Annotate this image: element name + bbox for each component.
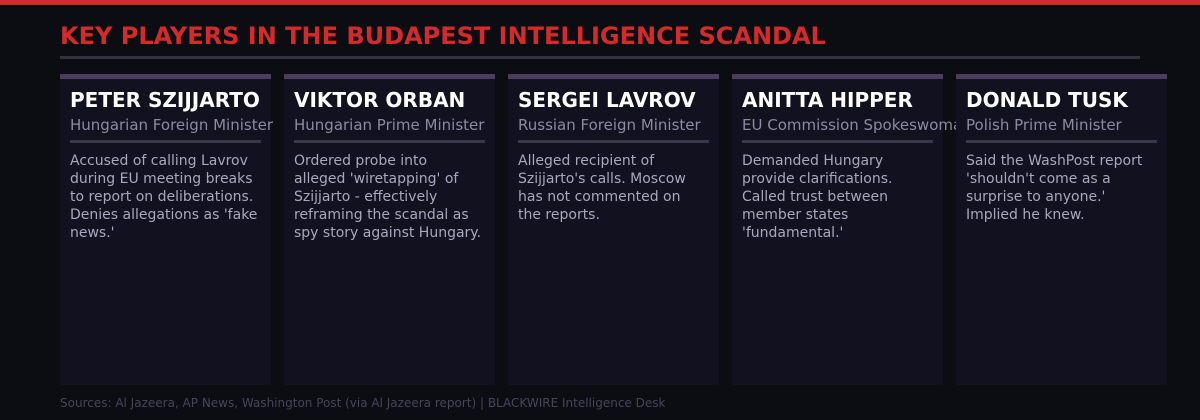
description: spy story against Hungary. xyxy=(294,225,481,241)
panel: Viktor Orban xyxy=(284,74,495,385)
description: news.' xyxy=(70,225,115,241)
description: Szijjarto's calls. Moscow xyxy=(518,171,686,187)
name: DONALD TUSK xyxy=(966,88,1128,112)
panel: Donald Tusk xyxy=(956,74,1167,385)
name: PETER SZIJJARTO xyxy=(70,88,260,112)
role: Polish Prime Minister xyxy=(966,116,1122,134)
panel: Sergei Lavrov xyxy=(508,74,719,385)
description xyxy=(518,153,686,223)
description: provide clarifications. xyxy=(742,171,892,187)
role: Russian Foreign Minister xyxy=(518,116,701,134)
description: Denies allegations as 'fake xyxy=(70,207,257,223)
footer sources: Sources: Al Jazeera, AP News, Washington Post (via Al Jazeera report) | BLACKWIRE Intelligence Desk xyxy=(60,396,665,410)
panel: Anitta Hipper xyxy=(732,74,943,385)
description: member states xyxy=(742,207,848,223)
name: VIKTOR ORBAN xyxy=(294,88,465,112)
description: to report on deliberations. xyxy=(70,189,253,205)
description: Implied he knew. xyxy=(966,207,1085,223)
description: surprise to anyone.' xyxy=(966,189,1105,205)
description: has not commented on xyxy=(518,189,680,205)
description: Demanded Hungary xyxy=(742,153,883,169)
description: Alleged recipient of xyxy=(518,153,654,169)
description xyxy=(294,153,481,241)
description: Szijjarto - effectively xyxy=(294,189,437,205)
description: Ordered probe into xyxy=(294,153,427,169)
role: EU Commission Spokeswoman xyxy=(742,116,972,134)
description: 'shouldn't come as a xyxy=(966,171,1111,187)
description: 'fundamental.' xyxy=(742,225,843,241)
description: the reports. xyxy=(518,207,600,223)
description: reframing the scandal as xyxy=(294,207,469,223)
panel: Peter Szijjarto xyxy=(60,74,271,385)
role: Hungarian Prime Minister xyxy=(294,116,484,134)
description xyxy=(966,153,1142,223)
title: KEY PLAYERS IN THE BUDAPEST INTELLIGENCE SCANDAL xyxy=(60,22,826,50)
description: Accused of calling Lavrov xyxy=(70,153,248,169)
description: alleged 'wiretapping' of xyxy=(294,171,458,187)
description: Called trust between xyxy=(742,189,888,205)
description: Said the WashPost report xyxy=(966,153,1142,169)
description: during EU meeting breaks xyxy=(70,171,253,187)
role: Hungarian Foreign Minister xyxy=(70,116,273,134)
name: ANITTA HIPPER xyxy=(742,88,913,112)
name: SERGEI LAVROV xyxy=(518,88,696,112)
description xyxy=(70,153,257,241)
description xyxy=(742,153,892,241)
